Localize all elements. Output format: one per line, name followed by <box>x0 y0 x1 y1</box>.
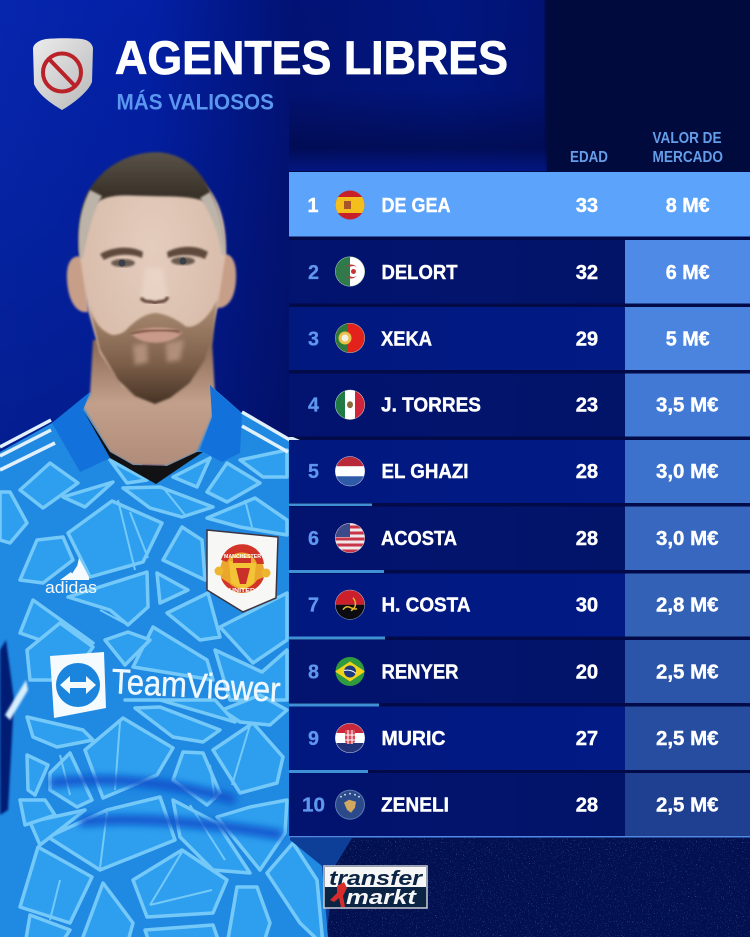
black undershirt <box>83 410 203 484</box>
flag: Portugal <box>335 323 365 353</box>
flag: Angola <box>335 590 365 620</box>
ears <box>67 254 236 312</box>
row 3: Xeka: 5 M€ <box>666 328 710 351</box>
transfermarkt logo: transfer <box>329 868 424 890</box>
row 1: De Gea: 1 <box>308 194 318 217</box>
gaps behind rows <box>289 171 750 837</box>
row 6: Acosta: ACOSTA <box>381 527 457 550</box>
collar <box>0 385 290 472</box>
eyes and brows <box>100 247 208 267</box>
row 2: Delort: 6 M€ <box>666 261 710 284</box>
row 5: El Ghazi: 28 <box>576 460 598 483</box>
row 4: J. Torres: J. TORRES <box>381 394 481 417</box>
transfermarkt logo <box>324 866 427 909</box>
row 10: Zeneli: ZENELI <box>381 794 449 817</box>
icon: prohibited shield <box>33 38 93 110</box>
row 9: Muric <box>289 706 750 770</box>
column headers <box>570 130 723 166</box>
transfermarkt logo: markt <box>346 887 418 909</box>
face <box>79 165 226 402</box>
row 2: Delort: DELORT <box>382 261 458 284</box>
column headers: MERCADO <box>652 149 723 166</box>
row 9: Muric: 2,5 M€ <box>656 727 719 750</box>
row 3: Xeka: 29 <box>576 328 598 351</box>
row 5: El Ghazi: 3,0 M€ <box>656 460 719 483</box>
row 7: H. Costa: 30 <box>576 594 598 617</box>
row 6: Acosta <box>289 506 750 570</box>
row 6: Acosta: 6 <box>308 527 319 550</box>
row 10: Zeneli: 2,5 M€ <box>656 794 719 817</box>
Manchester United crest: UNITED <box>229 588 256 594</box>
row 1: De Gea: 8 M€ <box>666 194 710 217</box>
lower body cells <box>85 718 173 798</box>
shirt glimpses in row gaps <box>289 437 385 773</box>
flag: Mexico <box>335 390 365 420</box>
row 7: H. Costa <box>289 574 750 636</box>
inner facet lines <box>50 490 252 920</box>
row 2: Delort: 2 <box>308 261 319 284</box>
row 4: J. Torres <box>289 374 750 436</box>
row 2: Delort: 32 <box>576 261 598 284</box>
row 3: Xeka <box>289 307 750 370</box>
row 3: Xeka: 3 <box>308 328 319 351</box>
starry ground at the bottom <box>300 838 750 937</box>
row 4: J. Torres: 4 <box>308 394 320 417</box>
beard <box>88 300 217 404</box>
flag: Algeria <box>335 256 365 286</box>
flag: Netherlands <box>335 456 365 486</box>
row 5: El Ghazi: 5 <box>308 460 319 483</box>
TeamViewer sponsor: TeamViewer <box>111 662 282 710</box>
row 10: Zeneli <box>289 773 750 836</box>
subtitle: MÁS VALIOSOS <box>116 90 274 114</box>
flag: Spain <box>335 190 365 220</box>
table <box>289 130 750 838</box>
row 8: Renyer: 20 <box>576 661 598 684</box>
row 4: J. Torres: 23 <box>576 394 598 417</box>
row 2: Delort <box>289 240 750 304</box>
dark left edge <box>0 640 14 815</box>
flag: Brazil <box>335 656 365 686</box>
player portrait <box>0 152 352 937</box>
column headers: VALOR DE <box>652 130 722 147</box>
flag: Kosovo <box>335 790 365 820</box>
shirt folds <box>50 780 282 835</box>
row 4: J. Torres: 3,5 M€ <box>656 394 719 417</box>
adidas logo: adidas <box>45 578 97 597</box>
row 8: Renyer <box>289 640 750 703</box>
adidas logo <box>45 558 97 597</box>
row 1: De Gea: 33 <box>576 194 598 217</box>
flag: Croatia <box>335 723 365 753</box>
TeamViewer sponsor <box>50 652 282 718</box>
row 10: Zeneli: 10 <box>302 794 325 817</box>
column headers: EDAD <box>570 149 608 166</box>
row 1: De Gea: DE GEA <box>382 194 451 217</box>
row 9: Muric: 27 <box>576 727 598 750</box>
row 7: H. Costa: 7 <box>308 594 319 617</box>
row 3: Xeka: XEKA <box>381 328 432 351</box>
row 8: Renyer: 2,5 M€ <box>656 661 719 684</box>
shirt <box>0 385 352 937</box>
row 6: Acosta: 28 <box>576 527 598 550</box>
chest pattern cells <box>0 450 323 937</box>
Manchester United crest: MANCHESTER <box>224 554 261 560</box>
flag: USA <box>335 523 365 553</box>
row 6: Acosta: 3,0 M€ <box>656 527 719 550</box>
row 10: Zeneli: 28 <box>576 794 598 817</box>
row 9: Muric: 9 <box>308 727 319 750</box>
row 9: Muric: MURIC <box>382 727 446 750</box>
row 5: El Ghazi <box>289 440 750 503</box>
row 1: De Gea <box>289 172 750 236</box>
hair <box>79 152 225 258</box>
row 7: H. Costa: 2,8 M€ <box>656 594 719 617</box>
Manchester United crest <box>207 530 278 612</box>
neck <box>83 340 215 466</box>
row 8: Renyer: 8 <box>308 661 319 684</box>
row 7: H. Costa: H. COSTA <box>382 594 471 617</box>
row 5: El Ghazi: EL GHAZI <box>382 460 468 483</box>
row 8: Renyer: RENYER <box>382 661 459 684</box>
title: AGENTES LIBRES <box>115 31 508 84</box>
nose <box>141 268 168 304</box>
